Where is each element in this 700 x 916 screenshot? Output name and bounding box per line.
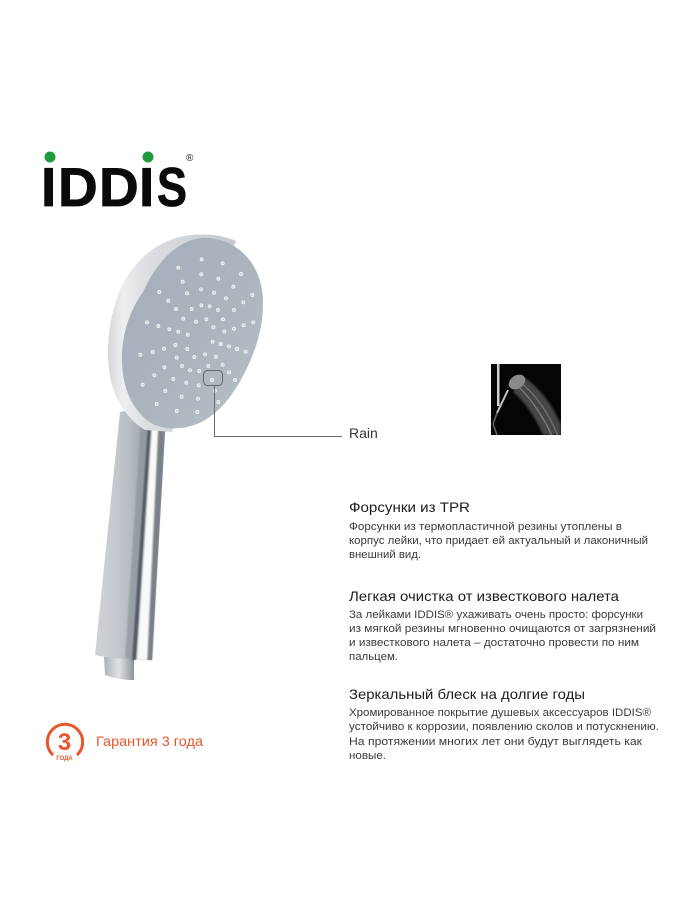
feature: easy cleaning: из мягкой резины мгновенно очищаются от загрязнений (349, 623, 656, 635)
photo: shower spray (491, 364, 561, 436)
callout: Rain (204, 370, 378, 441)
feature: mirror shine: Хромированное покрытие душевых аксессуаров IDDIS® (349, 707, 652, 719)
handle (95, 405, 176, 660)
warranty badge: Гарантия 3 года (96, 734, 204, 749)
nozzles (139, 258, 255, 414)
feature: easy cleaning (349, 588, 656, 663)
callout: Rain: Rain (349, 425, 378, 441)
shower head illustration (95, 235, 263, 680)
feature: easy cleaning: За лейками IDDIS® ухаживать очень просто: форсунки (349, 609, 643, 621)
feature: easy cleaning: Легкая очистка от известкового налета (349, 588, 619, 604)
feature: easy cleaning: пальцем. (349, 651, 398, 663)
warranty badge: 3 (58, 729, 71, 756)
feature: nozzles (349, 499, 648, 561)
head shell (108, 235, 236, 432)
logo: IDDIS: S (157, 156, 187, 218)
feature: nozzles: Форсунки из TPR (349, 499, 470, 515)
feature: nozzles: внешний вид. (349, 549, 421, 561)
logo: IDDIS: IDDI (41, 156, 154, 218)
feature: mirror shine (349, 686, 659, 762)
feature: mirror shine: новые. (349, 750, 386, 762)
feature: mirror shine: На протяжении многих лет они будут выглядеть как (349, 736, 642, 748)
feature: mirror shine: устойчиво к коррозии, появлению сколов и потускнению. (349, 721, 659, 733)
thread connector (104, 657, 134, 680)
warranty badge (47, 724, 204, 762)
feature: nozzles: Форсунки из термопластичной резины утоплены в (349, 521, 622, 533)
logo: IDDIS: ® (186, 153, 194, 164)
logo: IDDIS (41, 152, 194, 218)
feature: easy cleaning: и известкового налета – достаточно провести по ним (349, 637, 639, 649)
head face (122, 238, 263, 428)
feature: mirror shine: Зеркальный блеск на долгие годы (349, 686, 585, 702)
feature: nozzles: корпус лейки, что придает ей актуальный и лаконичный (349, 535, 648, 547)
warranty badge: ГОДА (56, 756, 73, 762)
